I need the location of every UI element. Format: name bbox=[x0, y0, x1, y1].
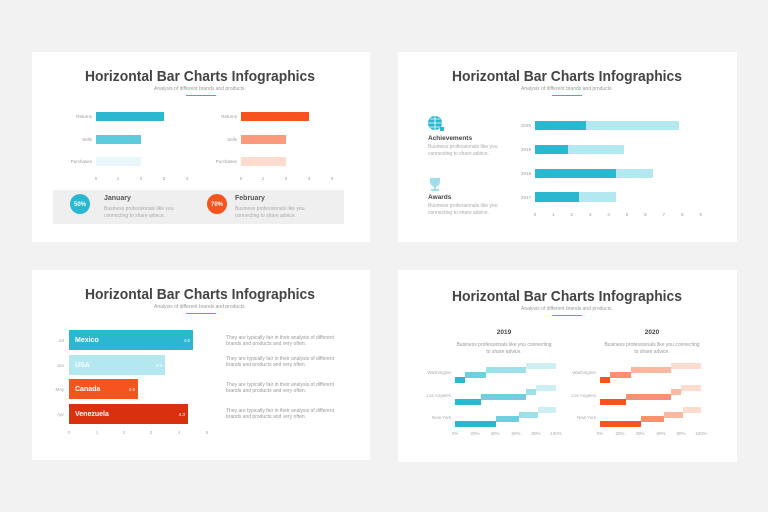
chart: 2020: Los Angeles bbox=[571, 393, 597, 398]
chart: years: 5 bbox=[626, 212, 629, 217]
chart: 2020: 2020 bbox=[645, 329, 660, 336]
chart: 2020: New York bbox=[577, 415, 597, 420]
panel: bottom-right stepped bars: Horizontal Bar Charts Infographics bbox=[452, 288, 682, 305]
chart: 2020: 40% bbox=[635, 431, 645, 436]
chart: right: 3 bbox=[308, 176, 311, 181]
chart: right: Sells bbox=[227, 137, 238, 142]
chart: years: 2018 bbox=[521, 171, 531, 176]
panel: bottom-left country bars: Analysis of different brands and products. bbox=[154, 304, 246, 310]
chart: years: 2020 bbox=[521, 123, 531, 128]
chart: 2019: 60% bbox=[511, 431, 521, 436]
text blocks bbox=[226, 335, 335, 420]
text blocks: They are typically fair in their analysis of different bbox=[226, 356, 335, 362]
text: achievements: Achievements bbox=[428, 135, 472, 142]
chart: countries: 5 bbox=[206, 430, 209, 435]
chart: years: 6 bbox=[644, 212, 647, 217]
info box: February bbox=[235, 195, 265, 202]
chart: 2019: Washington bbox=[427, 370, 451, 375]
chart: left: 1 bbox=[117, 176, 120, 181]
chart: years: 7 bbox=[663, 212, 666, 217]
info box: Business professionals like you bbox=[104, 206, 174, 212]
panel: top-right stacked bars: Analysis of different brands and products. bbox=[521, 86, 613, 92]
chart: years: 3 bbox=[589, 212, 592, 217]
chart: countries bbox=[55, 330, 209, 435]
chart: countries: 2.5 bbox=[129, 387, 135, 392]
chart: 2020: 100% bbox=[695, 431, 707, 436]
chart: 2019: 80% bbox=[531, 431, 541, 436]
info box: January bbox=[104, 195, 131, 202]
chart: 2019: 40% bbox=[490, 431, 500, 436]
panel: top-right stacked bars: Awards bbox=[428, 194, 452, 201]
chart: 2019: 100% bbox=[550, 431, 562, 436]
text blocks: They are typically fair in their analysis of different bbox=[226, 408, 335, 414]
chart: right bbox=[216, 112, 334, 181]
chart: years: 2017 bbox=[521, 195, 531, 200]
chart: left: 3 bbox=[163, 176, 166, 181]
chart: 2019: New York bbox=[432, 415, 452, 420]
chart: years: 2019 bbox=[521, 147, 531, 152]
chart: 2020: 0% bbox=[597, 431, 603, 436]
chart: countries: Jul bbox=[58, 338, 64, 343]
panel: top-right stacked bars: Business professionals like you bbox=[428, 203, 498, 209]
chart: 2019 bbox=[426, 329, 562, 436]
chart: countries: May bbox=[55, 387, 65, 392]
chart: left: Sells bbox=[82, 137, 93, 142]
icon: trophy bbox=[430, 178, 440, 191]
chart: years bbox=[521, 121, 702, 217]
chart: countries: Venezuela bbox=[75, 411, 109, 418]
title: Horizontal Bar Charts Infographics bbox=[85, 68, 315, 85]
panel: top-right stacked bars: connecting to share advice. bbox=[428, 151, 489, 157]
chart: 2020: 20% bbox=[615, 431, 625, 436]
chart: countries: 1 bbox=[96, 430, 99, 435]
chart: countries: 3 bbox=[150, 430, 153, 435]
icon: globe bbox=[428, 116, 444, 131]
chart: countries: Jun bbox=[57, 363, 64, 368]
panel: top-right stacked bars bbox=[398, 52, 737, 242]
chart: 2019: to share advice. bbox=[486, 349, 522, 355]
info box: connecting to share advice. bbox=[104, 213, 165, 219]
chart: right: Returns bbox=[221, 114, 238, 119]
chart: 2019: 20% bbox=[470, 431, 480, 436]
chart: 2020: 80% bbox=[676, 431, 686, 436]
chart: years: 4 bbox=[607, 212, 610, 217]
text blocks: brands and products and very often. bbox=[226, 362, 306, 368]
chart: countries: 2 bbox=[123, 430, 126, 435]
chart: years: 1 bbox=[552, 212, 555, 217]
info box: 70% bbox=[211, 202, 224, 208]
chart: left: 0 bbox=[95, 176, 98, 181]
chart: countries: USA bbox=[75, 362, 90, 369]
info box bbox=[53, 190, 344, 224]
title: Horizontal Bar Charts Infographics bbox=[452, 68, 682, 85]
chart: countries: Canada bbox=[75, 386, 100, 393]
chart: 2020: Washington bbox=[572, 370, 596, 375]
chart: right: Purchases bbox=[216, 159, 238, 164]
chart: left: 4 bbox=[186, 176, 189, 181]
chart: left: Returns bbox=[76, 114, 93, 119]
panel: bottom-right stepped bars bbox=[398, 270, 737, 462]
chart: countries: 0 bbox=[68, 430, 71, 435]
info box: Business professionals like you bbox=[235, 206, 305, 212]
chart: countries: 4 bbox=[178, 430, 181, 435]
chart: left: Purchases bbox=[71, 159, 93, 164]
text blocks: They are typically fair in their analysis of different bbox=[226, 335, 335, 341]
chart: 2019: Business professionals like you connecting bbox=[456, 342, 552, 348]
chart: left: 2 bbox=[140, 176, 143, 181]
info box: connecting to share advice. bbox=[235, 213, 296, 219]
chart: 2019: 2019 bbox=[497, 329, 512, 336]
chart: right: 2 bbox=[285, 176, 288, 181]
chart: right: 4 bbox=[331, 176, 334, 181]
chart: countries: Mexico bbox=[75, 337, 99, 344]
panel: bottom-left country bars: Horizontal Bar Charts Infographics bbox=[85, 286, 315, 303]
text blocks: They are typically fair in their analysis of different bbox=[226, 382, 335, 388]
chart: countries: 3.5 bbox=[156, 363, 162, 368]
chart: 2020: 60% bbox=[656, 431, 666, 436]
chart: left bbox=[71, 112, 189, 181]
panel: top-right stacked bars: connecting to share advice. bbox=[428, 210, 489, 216]
info box: 50% bbox=[74, 202, 87, 208]
chart: 2019: 0% bbox=[452, 431, 458, 436]
panel: bottom-left country bars bbox=[32, 270, 370, 460]
panel: top-left bar charts bbox=[32, 52, 370, 242]
panel: top-right stacked bars: Business professionals like you bbox=[428, 144, 498, 150]
subtitle: Analysis of different brands and products. bbox=[154, 86, 246, 92]
chart: countries: 4.3 bbox=[179, 412, 185, 417]
chart: 2020: to share advice. bbox=[634, 349, 670, 355]
chart: 2020 bbox=[571, 329, 707, 436]
chart: years: 8 bbox=[681, 212, 684, 217]
chart: countries: Apr bbox=[57, 412, 64, 417]
text blocks: brands and products and very often. bbox=[226, 388, 306, 394]
text blocks: brands and products and very often. bbox=[226, 414, 306, 420]
chart: years: 0 bbox=[534, 212, 537, 217]
chart: years: 2 bbox=[571, 212, 574, 217]
chart: right: 1 bbox=[262, 176, 265, 181]
text blocks: brands and products and very often. bbox=[226, 341, 306, 347]
chart: 2020: Business professionals like you connecting bbox=[604, 342, 700, 348]
chart: countries: 4.5 bbox=[184, 338, 190, 343]
chart: right: 0 bbox=[240, 176, 243, 181]
chart: 2019: Los Angeles bbox=[426, 393, 452, 398]
chart: years: 9 bbox=[699, 212, 702, 217]
panel: bottom-right stepped bars: Analysis of different brands and products. bbox=[521, 306, 613, 312]
